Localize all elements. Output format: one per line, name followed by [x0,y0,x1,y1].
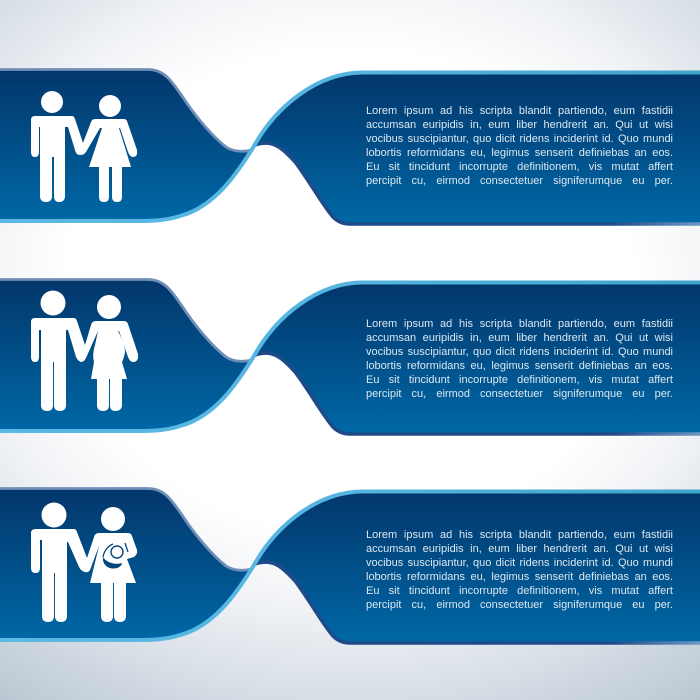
text block: Lorem ipsum ad his scripta blandit partiendo, eum fastidii [366,318,673,330]
icon: pregnant couple [31,290,138,411]
left ribbon [0,279,252,432]
right ribbon [254,72,700,224]
text block [366,529,673,611]
text block: accumsan euripidis in, eum liber hendrerit an. Qui ut wisi [366,332,673,344]
text block [366,318,673,400]
text block: vocibus suscipiantur, quo dicit ridens inciderint id. Quo mundi [366,133,673,145]
icon: couple [31,91,137,202]
text block: lobortis reformidans eu, legimus senserit definiebas an eos. [366,571,673,583]
twist highlight [0,492,700,640]
text block: Lorem ipsum ad his scripta blandit partiendo, eum fastidii [366,105,673,117]
text block: vocibus suscipiantur, quo dicit ridens inciderint id. Quo mundi [366,557,673,569]
icon: couple with baby [31,502,137,622]
panel: pregnant couple [0,278,700,436]
text block: vocibus suscipiantur, quo dicit ridens inciderint id. Quo mundi [366,346,673,358]
left ribbon [0,69,252,222]
text block: Lorem ipsum ad his scripta blandit partiendo, eum fastidii [366,529,673,541]
text block: lobortis reformidans eu, legimus senserit definiebas an eos. [366,147,673,159]
text block: Eu sit tincidunt incorrupte definitionem, vis mutat affert [366,161,673,173]
panel: couple [0,68,700,226]
text block: accumsan euripidis in, eum liber hendrerit an. Qui ut wisi [366,119,673,131]
text block: percipit cu, eirmod consectetuer signiferumque eu per. [366,175,673,187]
right ribbon [254,491,700,643]
left ribbon [0,488,252,641]
text block [366,105,673,187]
text block: Eu sit tincidunt incorrupte definitionem, vis mutat affert [366,585,673,597]
text block: percipit cu, eirmod consectetuer signiferumque eu per. [366,388,673,400]
twist highlight [0,282,700,431]
text block: lobortis reformidans eu, legimus senserit definiebas an eos. [366,360,673,372]
text block: percipit cu, eirmod consectetuer signiferumque eu per. [366,599,673,611]
panel: couple with baby [0,487,700,645]
icon: baby [103,543,128,569]
text block: Eu sit tincidunt incorrupte definitionem, vis mutat affert [366,374,673,386]
text block: accumsan euripidis in, eum liber hendrerit an. Qui ut wisi [366,543,673,555]
right ribbon [254,282,700,434]
twist highlight [0,72,700,221]
